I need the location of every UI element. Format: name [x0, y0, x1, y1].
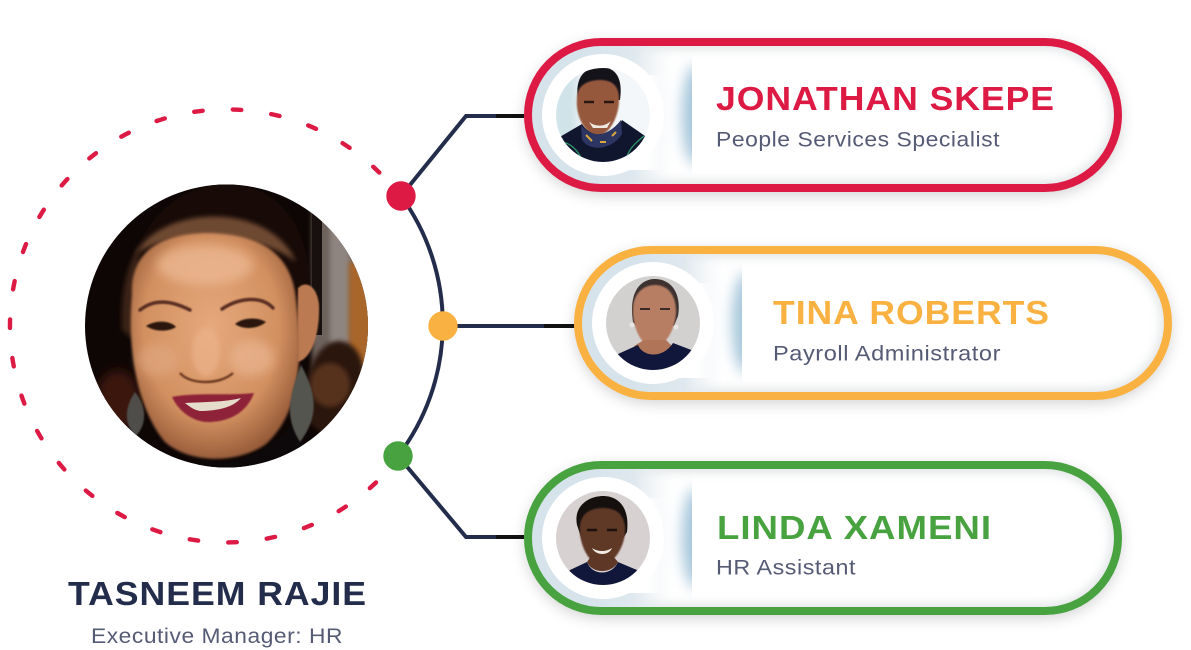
navy arc: [398, 196, 443, 456]
role: Executive Manager: HR: Executive Manager: HR: [91, 625, 343, 648]
card: Linda Xameni: [524, 461, 1122, 617]
name: LINDA XAMENI: [717, 510, 992, 547]
card: Tina Roberts: [574, 246, 1172, 402]
node: red: [386, 181, 416, 211]
name: JONATHAN SKEPE: [716, 81, 1055, 118]
role: People Services Specialist: [716, 128, 1000, 152]
earrings: [127, 392, 144, 436]
role: HR Assistant: [716, 556, 856, 580]
name: Tasneem Rajie: TASNEEM RAJIE: [68, 576, 367, 613]
portrait: Jonathan Skepe: [552, 67, 650, 165]
portrait: Tasneem Rajie: [80, 180, 375, 480]
role: Payroll Administrator: [773, 342, 1001, 366]
mouth: [172, 393, 254, 422]
name: TINA ROBERTS: [773, 295, 1050, 332]
connector: Jonathan: [401, 116, 526, 196]
connector: Tina: [443, 324, 576, 328]
node: yellow: [428, 311, 458, 341]
portrait: Linda Xameni: [556, 491, 650, 590]
portrait: Tina Roberts: [606, 276, 700, 372]
eyebrows and eyes: [140, 299, 273, 331]
nose: [180, 373, 233, 382]
card: Jonathan Skepe: [524, 38, 1122, 194]
dashed circle: [10, 109, 379, 542]
node: green: [383, 441, 413, 471]
connector: Linda: [398, 456, 526, 537]
